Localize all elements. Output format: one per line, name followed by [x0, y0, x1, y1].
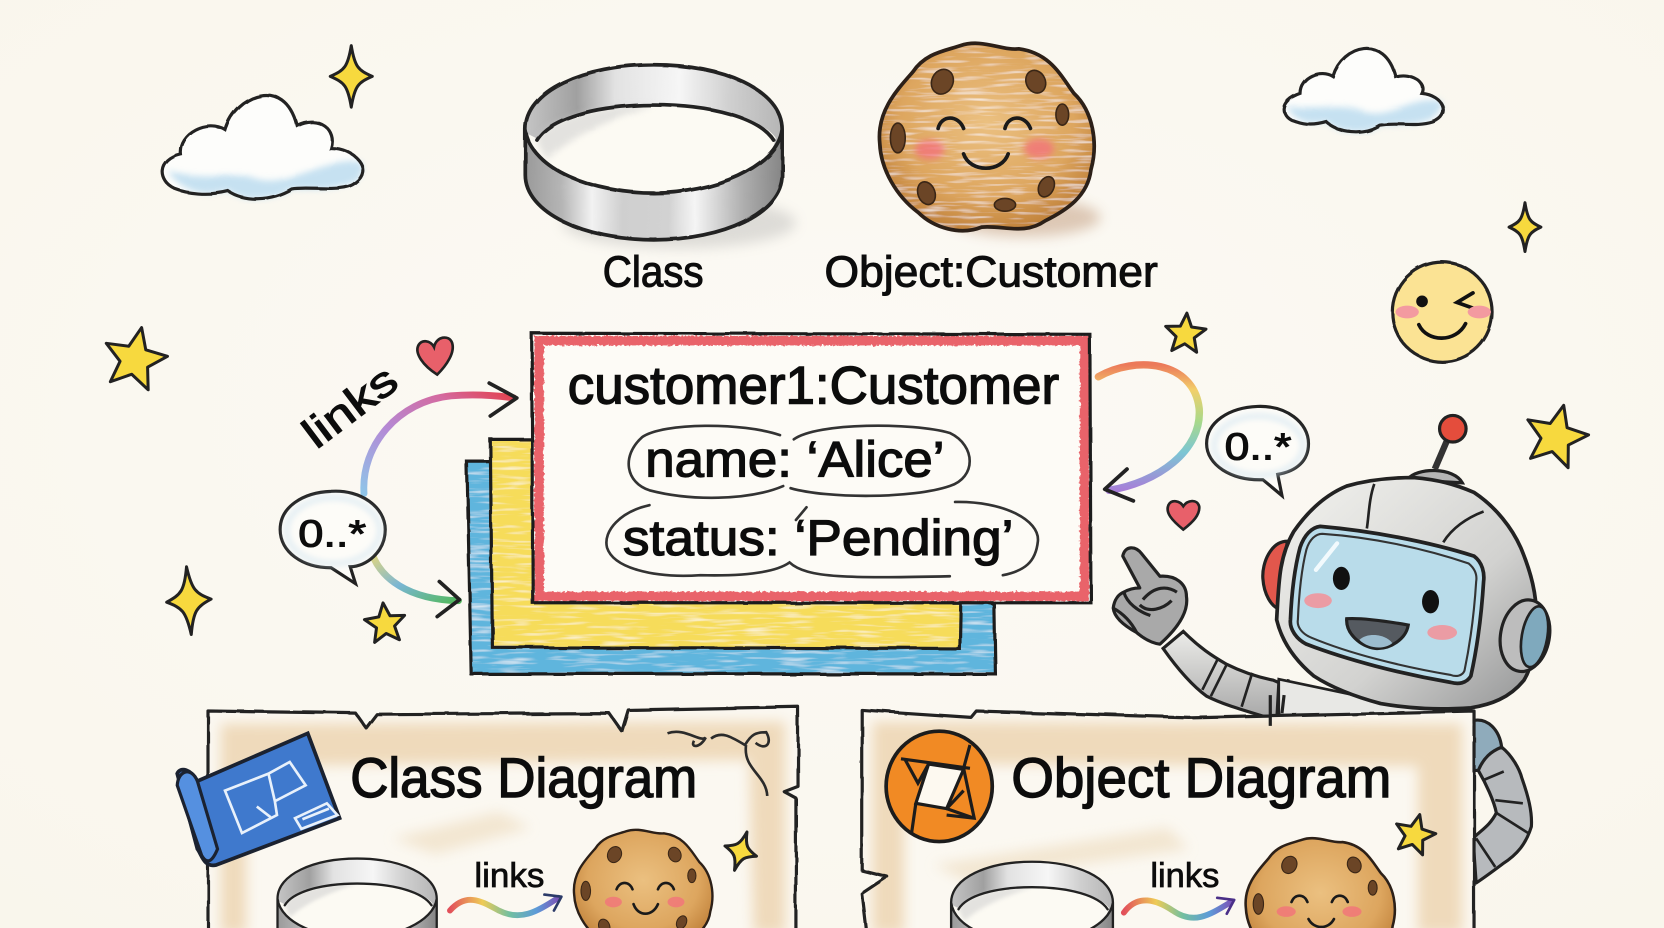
star: by main box: [1164, 312, 1207, 353]
object name: customer1:Customer: [568, 356, 1059, 415]
label: Class: Class: [603, 249, 704, 297]
sparkle: [719, 827, 763, 875]
smiley emoji: [1392, 262, 1492, 362]
robot eyes: [1333, 567, 1439, 613]
star: far right: [1519, 398, 1594, 471]
robot near arm: [1163, 631, 1350, 718]
robot visor: [1290, 526, 1484, 683]
speech bubble: right multiplicity: [1207, 406, 1308, 496]
sparkle: right: [1509, 203, 1541, 252]
sparkle: lower left: [164, 565, 213, 636]
small cookie: [1246, 838, 1395, 928]
star: by bubble: [363, 601, 407, 643]
small cookie: [574, 830, 712, 928]
main object box: [532, 333, 1091, 603]
squiggle arrow: [450, 895, 561, 915]
arrow: multiplicity to sheets: [371, 552, 460, 617]
squiggle arrow: [1124, 898, 1234, 918]
arrow: links to box: [364, 383, 517, 493]
sparkle: top left: [330, 46, 372, 107]
icon: blueprint: [177, 733, 340, 865]
robot far arm: [1473, 720, 1532, 883]
robot mouth: [1347, 619, 1408, 648]
star: [1391, 810, 1439, 857]
speech bubble: left multiplicity: 0..*: [298, 513, 366, 556]
robot torso: [1279, 679, 1471, 724]
panel heading: Class Diagram: [350, 747, 697, 809]
robot head: [1277, 478, 1537, 709]
heart: lower right: [1168, 501, 1199, 530]
robot hand: [1113, 548, 1187, 644]
torn corner scribble: [668, 732, 769, 796]
attribute: name: name: ‘Alice’: [645, 431, 944, 487]
robot right ear: [1495, 596, 1555, 675]
stacked sheet: yellow: [490, 439, 960, 648]
icon: object aperture: [886, 731, 992, 842]
heart: upper left: [417, 338, 453, 375]
panel: Object Diagram: [855, 695, 1481, 928]
helmet seams: [1367, 484, 1484, 542]
cookie smile: [938, 118, 1030, 168]
links label: links: [1150, 857, 1219, 895]
panel heading: Object Diagram: [1011, 747, 1391, 809]
label: Object:Customer: Object:Customer: [825, 249, 1158, 297]
small ring: [278, 859, 437, 928]
star: big left: [99, 321, 172, 392]
panel paper: [215, 715, 792, 928]
arm overlap line: [1270, 695, 1284, 726]
speech bubble: right multiplicity: 0..*: [1225, 426, 1292, 469]
robot cheeks: [1304, 593, 1457, 640]
panel paper: [855, 700, 1481, 928]
panel outline: [862, 710, 1474, 928]
panel: Class Diagram: [177, 700, 807, 928]
icon: cookie object: [879, 43, 1100, 237]
attribute oval: status: [606, 502, 1038, 577]
robot mascot: [1113, 415, 1555, 883]
cookie cheeks: [915, 139, 1054, 159]
robot left ear: [1263, 541, 1287, 609]
label: links rotated: links: [293, 356, 406, 457]
links label: links: [474, 857, 544, 895]
attribute: status: status: ‘Pending’: [623, 510, 1013, 566]
panel outline: [208, 707, 798, 928]
icon: class ring (cookie cutter): [525, 65, 796, 248]
small ring: [951, 862, 1113, 928]
attribute oval: name: [629, 426, 970, 498]
cloud: top left: [162, 95, 363, 199]
arrow: self link right: [1098, 365, 1199, 501]
stacked sheet: blue: [467, 462, 995, 674]
cloud: top right: [1284, 48, 1443, 132]
robot antenna: [1407, 415, 1466, 483]
speech bubble: left multiplicity: [280, 491, 385, 584]
